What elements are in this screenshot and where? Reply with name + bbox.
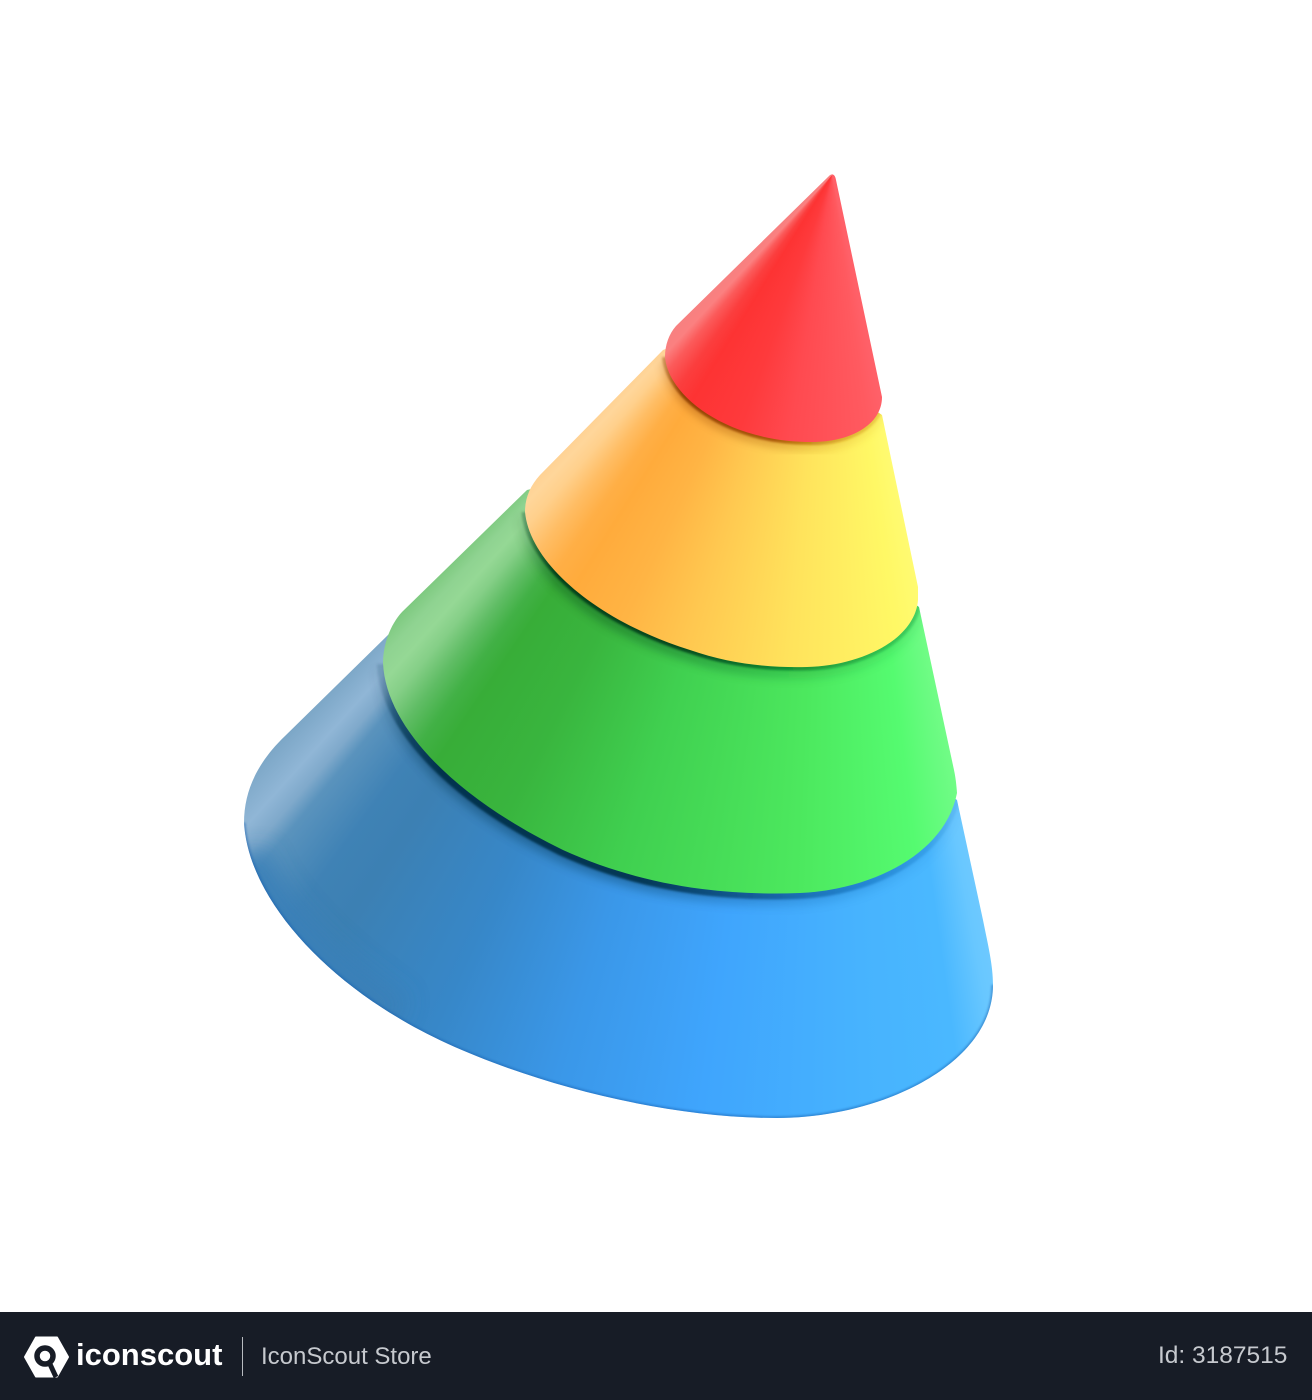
divider: [242, 1337, 243, 1376]
logo wordmark: iconscout: [76, 1337, 222, 1372]
illustration: four-layer 3D cone pyramid: [244, 174, 993, 1118]
layer: red tip: [665, 174, 882, 442]
asset id: Id: 3187515: [1158, 1342, 1287, 1369]
layer: yellow: [525, 349, 918, 668]
store label: IconScout Store: [261, 1343, 432, 1370]
layer: green: [383, 489, 957, 894]
icon: iconscout logo: [24, 1336, 69, 1378]
footer bar: [0, 1312, 1312, 1400]
layer: blue base: [244, 634, 993, 1118]
